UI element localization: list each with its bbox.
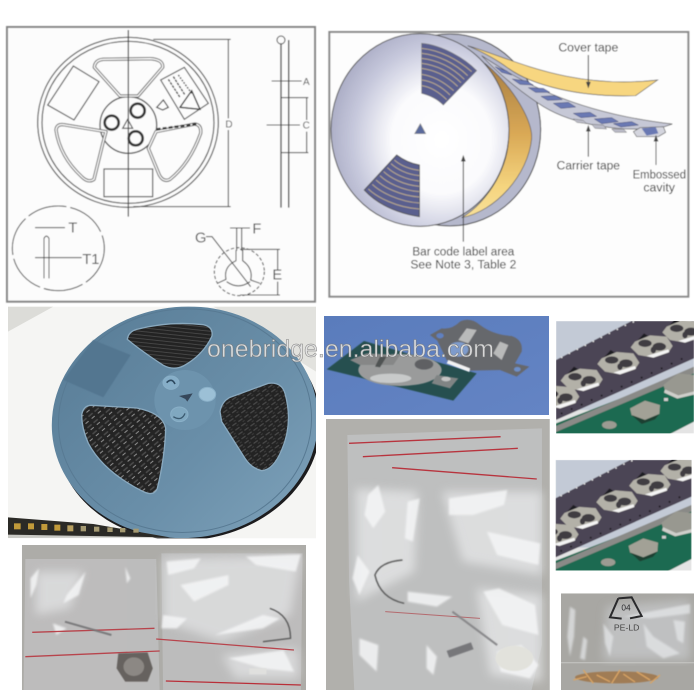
window right	[220, 383, 288, 471]
carrier tape strip	[8, 517, 170, 538]
front reel flange	[331, 34, 509, 226]
dimension letters: G	[195, 231, 206, 247]
zip seals	[349, 437, 537, 618]
panel: large bag on grey background	[326, 419, 550, 690]
watermark: onebridge.en.alibaba.com	[207, 336, 494, 363]
dimension letters: D	[225, 120, 233, 131]
callouts: Bar code label area	[412, 244, 515, 258]
holder floating	[430, 320, 529, 377]
wound tape	[462, 63, 532, 218]
panel: holders in carrier tape, upper	[556, 321, 694, 434]
metal parts in bag	[375, 560, 533, 671]
panel: reel and tape illustration	[329, 32, 688, 297]
panel: photo of blue reel	[8, 306, 316, 538]
dimension letters: A	[303, 77, 310, 88]
dimension lines	[12, 30, 308, 296]
film glow	[356, 488, 542, 682]
hub triangle	[415, 124, 426, 134]
recycling code text: 04	[621, 603, 631, 613]
panel: battery holder render on blue background	[324, 316, 549, 415]
hub triangle	[179, 393, 193, 402]
reel window arcs top	[422, 48, 472, 100]
recycling code text: PE-LD	[614, 623, 639, 633]
film highlights	[353, 485, 540, 678]
dark tape coil behind reel	[68, 376, 316, 538]
dimension letters: T1	[82, 252, 99, 268]
bag film	[347, 428, 542, 690]
panel: technical drawing of reel	[7, 27, 315, 302]
dimension letters: F	[252, 221, 261, 237]
film glow	[603, 600, 690, 660]
label patch	[63, 340, 131, 397]
label artwork on reel	[157, 75, 200, 129]
pointer arrows	[462, 55, 658, 242]
metal parts in bags	[65, 608, 291, 682]
circuit board	[327, 341, 477, 401]
zip seals	[25, 628, 301, 685]
callouts: Cover tape	[558, 41, 619, 55]
film glow	[36, 555, 301, 678]
reel window arcs lower	[368, 160, 419, 209]
dimension letters: E	[272, 267, 282, 283]
hub holes	[163, 376, 216, 422]
reel window top	[422, 43, 477, 105]
reel body	[52, 306, 316, 538]
recycling code text	[614, 604, 639, 630]
film highlights	[567, 604, 690, 660]
carrier tape	[482, 56, 672, 137]
panel: two bags on grey background	[22, 545, 306, 690]
dimension letters: C	[303, 121, 310, 132]
rear reel flange	[359, 34, 541, 226]
hub	[154, 370, 210, 426]
callouts	[410, 41, 686, 271]
dimension letters	[68, 77, 310, 283]
reel outline drawing	[38, 37, 218, 207]
film highlights	[30, 554, 301, 672]
recycling symbol	[610, 597, 642, 619]
window top	[127, 323, 212, 368]
gold parts	[573, 670, 660, 683]
callouts: Carrier tape	[557, 158, 620, 172]
window left	[82, 405, 166, 494]
dimension letters: T	[68, 221, 77, 237]
callouts: cavity	[643, 180, 675, 194]
callouts: Embossed	[633, 167, 686, 181]
cover tape	[468, 46, 658, 96]
panel: bag with clear pellets and recycling mark	[561, 593, 694, 690]
holder on board	[350, 353, 458, 388]
reel window lower left	[364, 155, 419, 217]
callouts: See Note 3, Table 2	[410, 257, 517, 271]
panel: holders in carrier tape, lower	[556, 460, 692, 570]
bag film	[24, 553, 303, 690]
